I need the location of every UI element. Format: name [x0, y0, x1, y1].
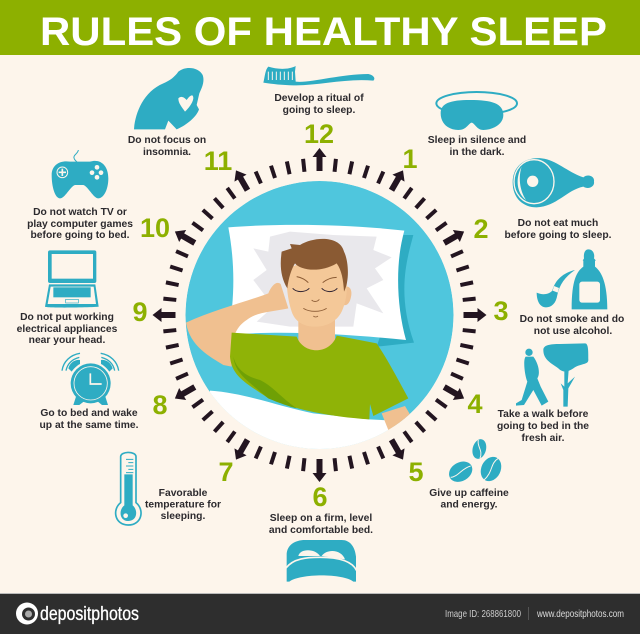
text: same time: up at the same time. [40, 420, 139, 431]
text: walk [497, 409, 589, 444]
text: smoke: not use alcohol. [534, 326, 612, 337]
text: temperature: sleeping. [161, 511, 205, 522]
text: silence: in the dark. [450, 147, 505, 158]
text: eat: before going to sleep. [505, 230, 612, 241]
clock numbers: 7 [218, 457, 234, 487]
text: eat: Do not eat much [518, 218, 598, 229]
text: walk: going to bed in the [497, 421, 589, 432]
icon: pipe and bottle [537, 249, 607, 309]
icon: toothbrush [263, 66, 374, 85]
clock numbers: 10 [140, 213, 170, 243]
icon: coffee beans [445, 438, 505, 486]
footer image id: Image ID: 268861800 [445, 608, 521, 620]
sleeping man illustration [186, 181, 454, 449]
footer bar [0, 593, 640, 634]
text: temperature: Favorable [159, 488, 208, 499]
icon: insomnia person [134, 68, 203, 129]
icon: game controller [52, 150, 108, 198]
text: TV and games: Do not watch TV or [33, 207, 127, 218]
clock numbers: 5 [408, 457, 424, 487]
icon: walking person and tree [516, 343, 588, 407]
text: silence [428, 135, 526, 158]
icon: thermometer [116, 452, 141, 525]
clock numbers: 11 [204, 146, 232, 176]
text: electrical appliances: near your head. [29, 335, 105, 346]
text: ritual: Develop a ritual of [274, 93, 364, 104]
clock numbers: 1 [402, 144, 418, 174]
text: bed: Sleep on a firm, level [270, 513, 372, 524]
text: ritual: going to sleep. [283, 105, 355, 116]
text: caffeine: and energy. [440, 500, 498, 510]
clock numbers: 8 [152, 390, 168, 420]
text: electrical appliances: electrical appliances [17, 324, 118, 335]
clock numbers: 9 [132, 297, 148, 327]
text: bed [269, 513, 373, 536]
text: TV and games: play computer games [27, 219, 133, 230]
clock numbers: 3 [493, 296, 509, 326]
text: ritual [274, 93, 364, 116]
icon: laptop [45, 250, 99, 308]
text: smoke [520, 314, 624, 337]
footer logo: depositphotos [40, 604, 139, 625]
text: same time: Go to bed and wake [40, 408, 138, 419]
clock numbers: 4 [467, 389, 483, 419]
title banner: RULES OF HEALTHY SLEEP [40, 10, 607, 54]
icon: bed [286, 540, 357, 582]
icon: sleep mask [436, 92, 517, 130]
text: temperature: temperature for [145, 500, 221, 510]
text: smoke: Do not smoke and do [520, 314, 624, 325]
text: eat [505, 218, 612, 241]
text: TV and games: before going to bed. [31, 230, 130, 241]
text: insomnia [128, 135, 206, 158]
clock dial [152, 148, 487, 482]
text: caffeine: Give up caffeine [429, 488, 509, 499]
text: temperature [145, 488, 221, 522]
text: insomnia: insomnia. [143, 147, 191, 158]
icon: ham [513, 158, 594, 207]
text: electrical appliances [17, 312, 118, 346]
clock numbers [132, 119, 509, 512]
text: electrical appliances: Do not put working [20, 312, 114, 323]
text: TV and games [27, 207, 133, 241]
text: caffeine [429, 488, 509, 510]
text: insomnia: Do not focus on [128, 135, 206, 146]
icon: alarm clock [62, 353, 119, 405]
footer divider [528, 607, 529, 620]
title banner [0, 0, 640, 55]
clock numbers: 2 [473, 214, 489, 244]
clock numbers: 12 [304, 119, 334, 149]
text: silence: Sleep in silence and [428, 135, 526, 146]
footer logo [16, 602, 139, 625]
text: walk: fresh air. [522, 433, 565, 444]
text: bed: and comfortable bed. [269, 525, 373, 536]
text: same time [40, 408, 139, 431]
text: walk: Take a walk before [498, 409, 589, 420]
clock numbers: 6 [312, 482, 328, 512]
